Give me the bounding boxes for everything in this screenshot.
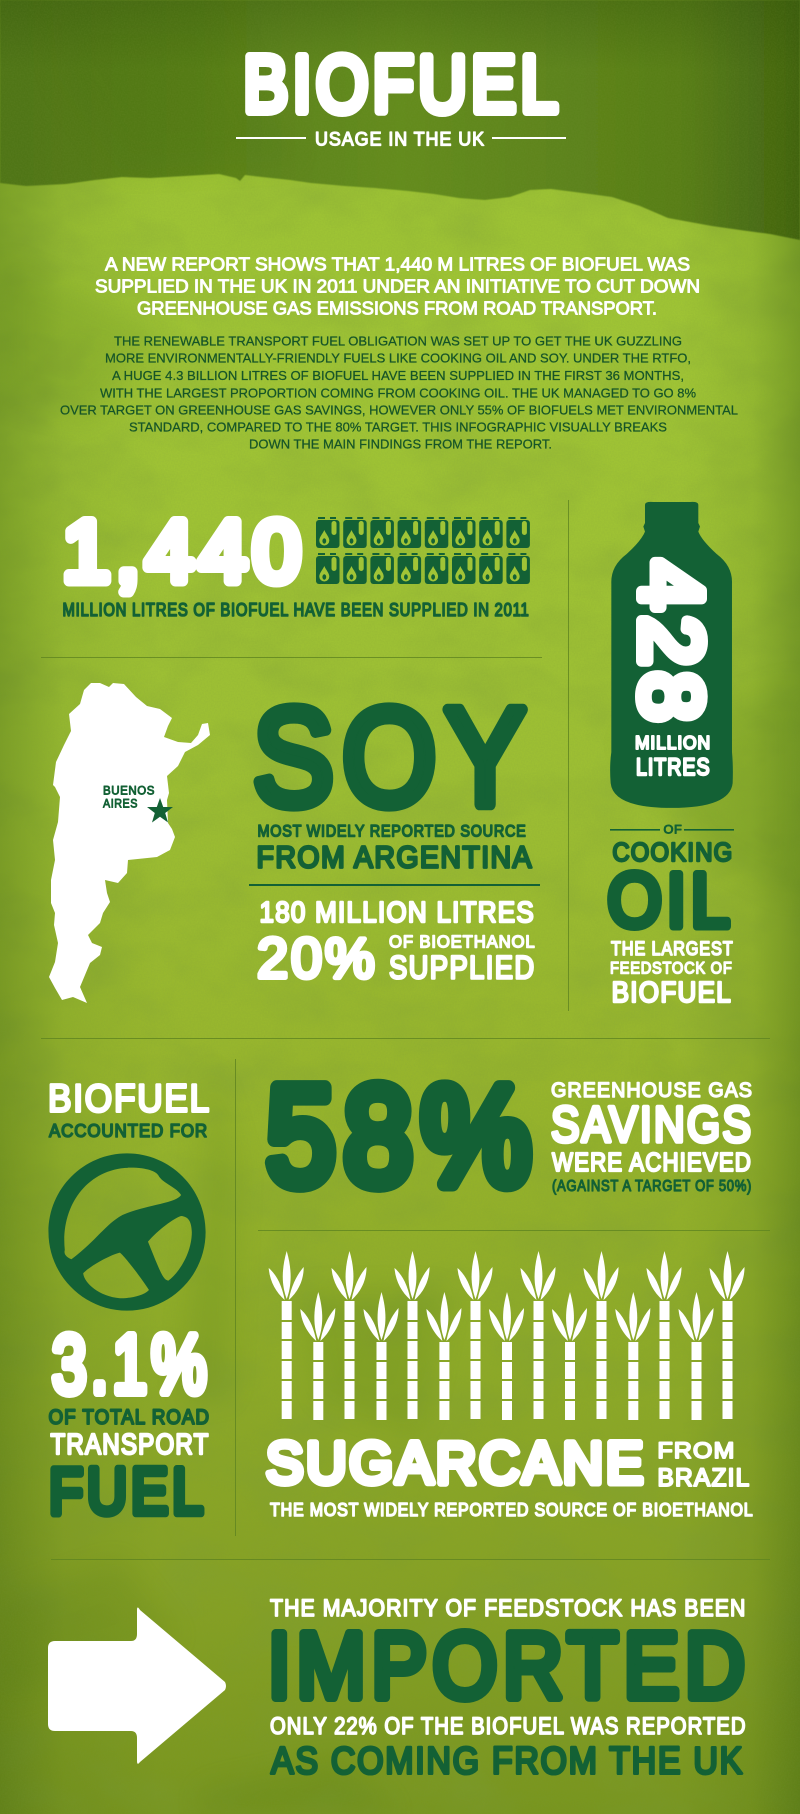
text line: AS COMING FROM THE UK — [271, 1740, 744, 1782]
stat: 3.1%: 3.1% — [52, 1318, 211, 1410]
intro heading: SUPPLIED IN THE UK IN 2011 UNDER AN INITIATIVE TO CUT DOWN — [95, 276, 700, 296]
title: BIOFUEL — [244, 40, 562, 129]
subtitle with rules: USAGE IN THE UK — [315, 128, 485, 150]
bottle label: LITRES — [636, 754, 710, 781]
caption: (AGAINST A TARGET OF 50%) — [552, 1178, 752, 1195]
bottle label — [635, 732, 711, 781]
intro body text: THE RENEWABLE TRANSPORT FUEL OBLIGATION WAS SET UP TO GET THE UK GUZZLING — [114, 334, 682, 349]
bottle number 428: 428 — [622, 560, 720, 728]
"of" with rules — [610, 822, 734, 836]
stat caption: SUPPLIED — [389, 949, 536, 986]
text line: THE MAJORITY OF FEEDSTOCK HAS BEEN — [270, 1596, 746, 1622]
heading: fuel: FUEL — [49, 1454, 207, 1528]
caption: SAVINGS — [551, 1097, 753, 1153]
caption: THE LARGEST — [611, 938, 734, 960]
caption: FEEDSTOCK OF — [610, 958, 732, 977]
intro heading — [95, 254, 700, 318]
Buenos Aires label: BUENOS — [103, 784, 155, 798]
heading: BIOFUEL — [48, 1078, 211, 1120]
intro body text: WITH THE LARGEST PROPORTION COMING FROM COOKING OIL. THE UK MANAGED TO GO 8% — [100, 385, 696, 400]
label: from Brazil: BRAZIL — [658, 1464, 750, 1492]
caption: THE MOST WIDELY REPORTED SOURCE OF BIOETHANOL — [270, 1500, 754, 1520]
label: from Brazil: FROM — [658, 1438, 736, 1463]
icon: arrow — [48, 1608, 226, 1764]
caption: BIOFUEL — [612, 977, 732, 1009]
intro body text: STANDARD, COMPARED TO THE 80% TARGET. THIS INFOGRAPHIC VISUALLY BREAKS — [129, 420, 667, 435]
subheading: ACCOUNTED FOR — [49, 1121, 208, 1141]
intro body text: A HUGE 4.3 BILLION LITRES OF BIOFUEL HAVE BEEN SUPPLIED IN THE FIRST 36 MONTHS, — [112, 368, 684, 383]
icon: fuel cans — [316, 517, 530, 584]
intro body text: DOWN THE MAIN FINDINGS FROM THE REPORT. — [249, 437, 552, 452]
big number 1,440: 1,440 — [62, 504, 306, 600]
icon: star — [147, 798, 173, 822]
heading: sugarcane: SUGARCANE — [266, 1431, 646, 1496]
panel: 1,440 million litres — [62, 504, 530, 620]
subheading: MOST WIDELY REPORTED SOURCE — [258, 821, 526, 840]
stat: 58%: 58% — [266, 1057, 540, 1214]
heading: cooking: COOKING — [612, 837, 733, 867]
Buenos Aires label: AIRES — [103, 797, 138, 811]
panel: greenhouse gas savings — [266, 1057, 753, 1214]
torn paper top band — [0, 0, 800, 240]
subheading: from Argentina: FROM ARGENTINA — [256, 840, 533, 875]
caption: GREENHOUSE GAS — [551, 1079, 753, 1102]
intro heading: GREENHOUSE GAS EMISSIONS FROM ROAD TRANSPORT. — [137, 298, 657, 318]
Buenos Aires label — [103, 784, 155, 811]
bottle label: MILLION — [635, 732, 711, 753]
panel: cooking oil — [608, 502, 734, 1009]
intro body text: MORE ENVIRONMENTALLY-FRIENDLY FUELS LIKE COOKING OIL AND SOY. UNDER THE RTFO, — [105, 351, 691, 366]
stat caption — [389, 931, 536, 986]
heading: imported: IMPORTED — [268, 1614, 751, 1718]
caption — [610, 938, 734, 1009]
panel: sugarcane — [266, 1251, 754, 1520]
icon: steering wheel — [48, 1153, 206, 1311]
caption: MILLION LITRES OF BIOFUEL HAVE BEEN SUPPLIED IN 2011 — [62, 600, 530, 620]
panel: imported feedstock — [48, 1596, 751, 1782]
heading: oil: OIL — [608, 858, 734, 944]
panel: soy from Argentina — [49, 680, 540, 1003]
intro body text — [60, 334, 738, 452]
heading: soy: SOY — [253, 680, 534, 834]
icon: sugarcane stalks — [269, 1251, 744, 1420]
caption: WERE ACHIEVED — [552, 1147, 752, 1177]
"of" with rules: OF — [664, 822, 682, 836]
label: from Brazil — [658, 1438, 750, 1492]
stat: 180 million litres: 180 MILLION LITRES — [260, 897, 535, 929]
caption — [551, 1079, 753, 1195]
caption: OF TOTAL ROAD — [48, 1404, 210, 1429]
intro heading: A NEW REPORT SHOWS THAT 1,440 M LITRES OF BIOFUEL WAS — [105, 254, 690, 274]
icon: bottle — [610, 502, 733, 808]
panel: road transport fuel — [48, 1078, 211, 1528]
caption: TRANSPORT — [50, 1429, 210, 1461]
stat: 20%: 20% — [257, 926, 378, 990]
intro body text: OVER TARGET ON GREENHOUSE GAS SAVINGS, HOWEVER ONLY 55% OF BIOFUELS MET ENVIRONMENTAL — [60, 402, 738, 417]
stat caption: OF BIOETHANOL — [389, 931, 536, 951]
map: Argentina — [49, 683, 210, 1003]
